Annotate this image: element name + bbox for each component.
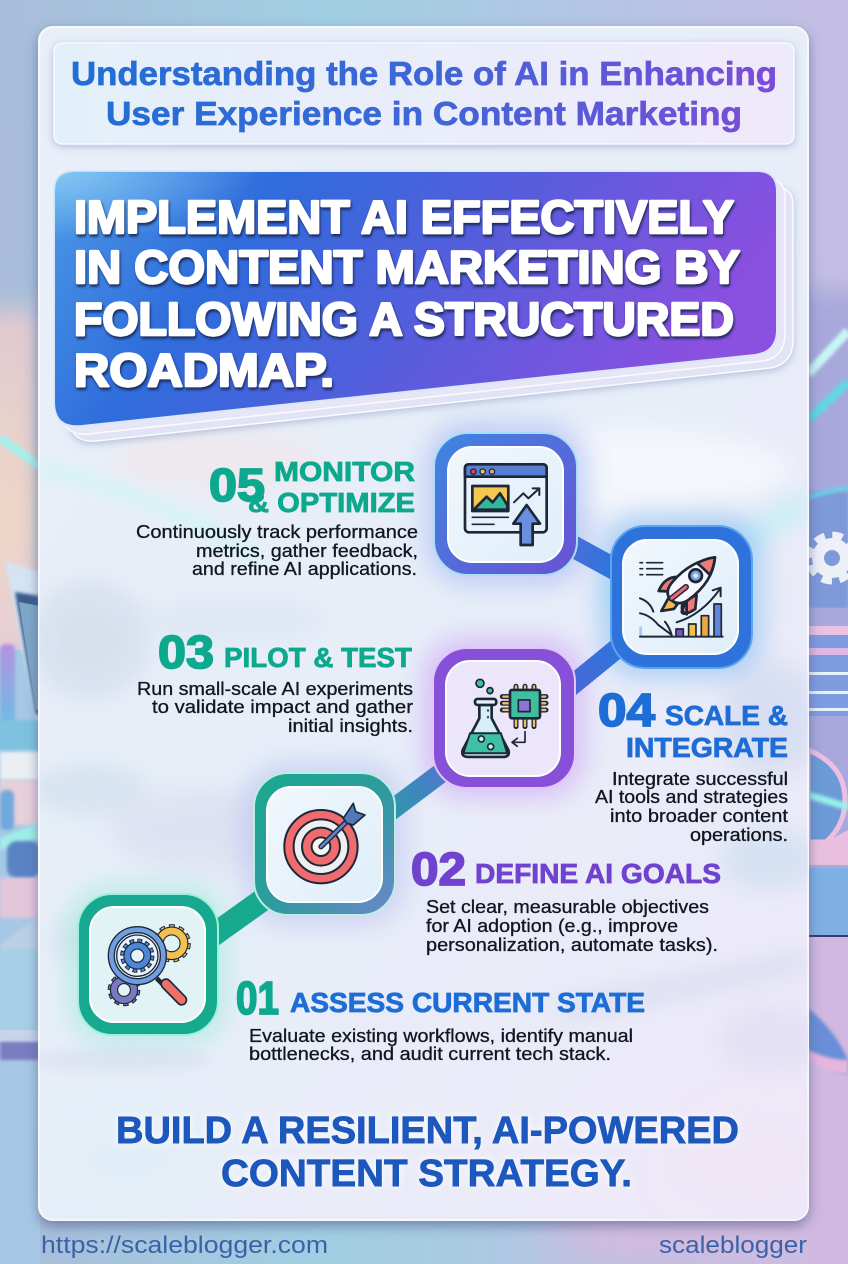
step 01 text: 01 [236, 972, 279, 1024]
step 05 text: Continuously track performance [136, 522, 418, 542]
icon: background gear [810, 536, 848, 580]
step 03 text: 03 [158, 626, 214, 678]
step 02 text: for AI adoption (e.g., improve [426, 916, 678, 936]
headline banner [54, 171, 793, 441]
tile glows [66, 421, 764, 1047]
title line 1: Understanding the Role of AI in Enhancing [71, 56, 777, 93]
icon: rocket with rising bars [640, 557, 723, 637]
step 03 text: to validate impact and gather [152, 697, 413, 717]
step 04 text: AI tools and strategies [595, 787, 788, 807]
headline text: IMPLEMENT AI EFFECTIVELY [74, 191, 734, 243]
step 05 text: and refine AI applications. [192, 559, 417, 579]
headline text: FOLLOWING A STRUCTURED [74, 293, 734, 345]
step 05 icon tile [434, 433, 577, 575]
step 03 text: PILOT & TEST [224, 642, 412, 673]
title panel [54, 43, 794, 144]
step 02 text: Set clear, measurable objectives [426, 897, 709, 917]
step 04 text: into broader content [610, 806, 788, 826]
step 04 text: operations. [690, 825, 788, 845]
footer url: https://scaleblogger.com [41, 1232, 328, 1259]
headline text [74, 191, 740, 396]
icon: magnifier with gears [110, 927, 188, 1004]
step 03 text [137, 626, 413, 736]
step 02 icon tile [254, 773, 395, 915]
step 04 text [595, 684, 788, 845]
step 01 text: Evaluate existing workflows, identify manual [249, 1026, 633, 1046]
step 05 text: MONITOR [274, 456, 415, 487]
step 05 text: & OPTIMIZE [248, 487, 415, 518]
step 04 text: INTEGRATE [626, 732, 788, 763]
closing call to action: BUILD A RESILIENT, AI-POWERED [116, 1110, 739, 1152]
step 05 text [136, 456, 418, 579]
step 02 text: personalization, automate tasks). [426, 935, 718, 955]
step 01 text: ASSESS CURRENT STATE [290, 987, 645, 1018]
step 03 text: Run small-scale AI experiments [137, 679, 413, 699]
step 01 text [236, 972, 645, 1064]
step 02 text: 02 [411, 843, 466, 895]
step 04 text: Integrate successful [612, 769, 788, 789]
step 02 text: DEFINE AI GOALS [475, 858, 721, 889]
headline text: IN CONTENT MARKETING BY [74, 241, 740, 293]
step 04 icon tile [611, 526, 752, 668]
step 03 icon tile [433, 648, 575, 788]
icon: target with arrow [284, 803, 365, 883]
icon: flask and chip [462, 679, 546, 757]
headline text: ROADMAP. [74, 344, 334, 396]
title line 2: User Experience in Content Marketing [106, 96, 742, 133]
step 04 text: SCALE & [665, 700, 788, 731]
step 01 text: bottlenecks, and audit current tech stack. [249, 1044, 611, 1064]
icon: browser with growth chart [465, 464, 547, 545]
step 04 text: 04 [598, 684, 655, 736]
closing call to action [116, 1110, 739, 1195]
step 03 text: initial insights. [288, 716, 413, 736]
closing call to action: CONTENT STRATEGY. [221, 1153, 632, 1195]
step 02 text [411, 843, 721, 955]
step 05 text: metrics, gather feedback, [196, 541, 418, 561]
footer brand: scaleblogger [659, 1232, 807, 1259]
step 01 icon tile [78, 894, 218, 1035]
roadmap connectors [205, 542, 625, 941]
step 05 text: 05 [209, 459, 265, 511]
